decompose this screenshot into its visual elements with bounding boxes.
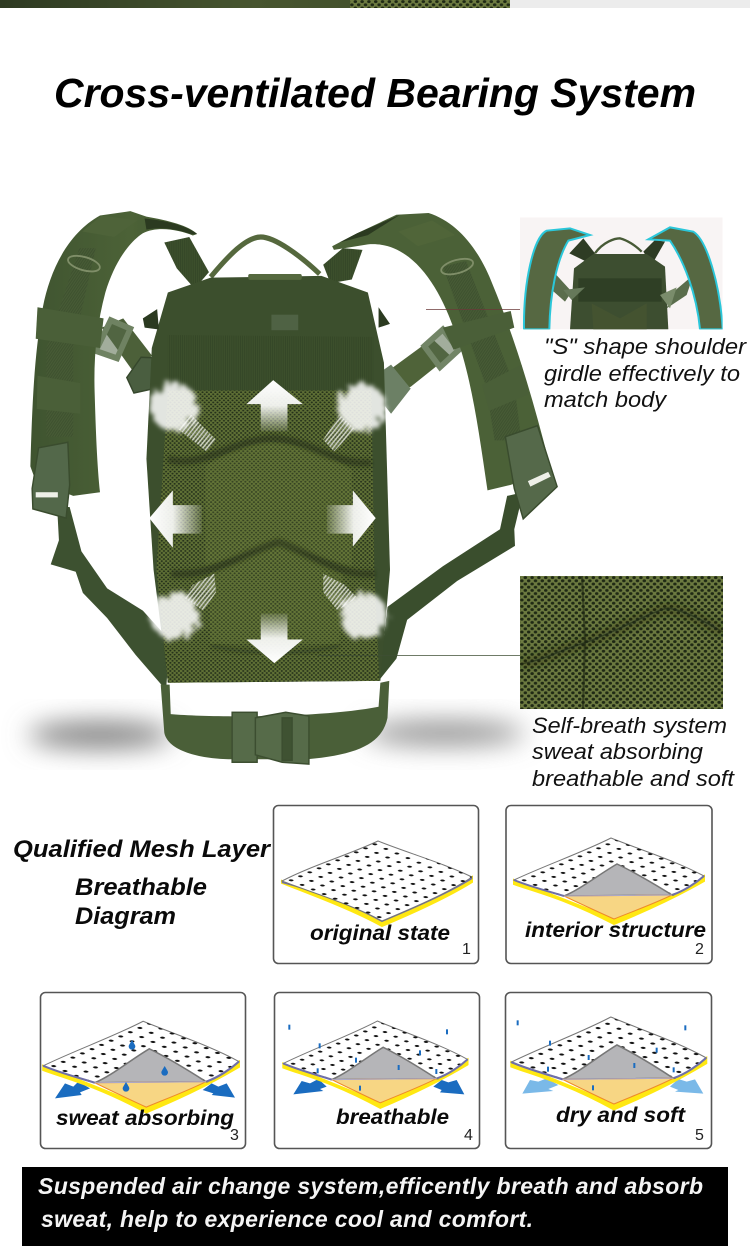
mesh back panel — [156, 390, 379, 683]
bottom banner: sweat, help to experience cool and comfort. — [41, 1206, 533, 1232]
shoulder caption — [544, 334, 748, 412]
left side strap and buckle — [96, 318, 184, 393]
leader line: shoulder detail — [426, 308, 520, 310]
diagram 1: original state — [274, 806, 478, 964]
arrow up — [246, 380, 303, 431]
mesh caption — [532, 713, 735, 791]
bottom banner: Suspended air change system,efficently breath and absorb — [38, 1173, 703, 1199]
shoulder caption: girdle effectively to — [544, 361, 740, 386]
bottom banner — [22, 1167, 728, 1246]
diagram 4: breathable — [274, 992, 480, 1148]
diagram 5: dry and soft — [506, 992, 712, 1148]
leader line: mesh detail — [318, 654, 520, 656]
mesh layer heading: Breathable — [75, 874, 207, 901]
backpack body — [143, 274, 390, 683]
waist buckle — [232, 712, 309, 764]
diagram 3: sweat absorbing: 3 — [230, 1127, 239, 1144]
waist belt — [161, 681, 389, 759]
inset: S-shape shoulder straps — [520, 217, 723, 329]
diagram 4: breathable: breathable — [336, 1106, 449, 1129]
mesh caption: breathable and soft — [532, 766, 735, 791]
left strap buckle — [32, 442, 70, 518]
mesh caption: Self-breath system — [532, 713, 727, 738]
diagram 5: dry and soft: dry and soft — [556, 1104, 686, 1127]
mesh layer heading — [13, 836, 272, 930]
right side strap and buckle — [366, 329, 459, 414]
lower left strap — [51, 507, 170, 690]
diagram 1: original state: original state — [310, 922, 450, 945]
shoulder caption: match body — [544, 387, 668, 412]
diagram 2: interior structure — [506, 806, 712, 964]
arrow left — [149, 490, 202, 548]
left shoulder strap — [30, 211, 197, 496]
diagram 2: interior structure: interior structure — [525, 919, 706, 942]
diagram 3: sweat absorbing — [40, 992, 246, 1148]
mesh layer heading: Qualified Mesh Layer — [13, 836, 272, 863]
shoulder caption: "S" shape shoulder — [544, 334, 748, 359]
air flow puffs — [150, 383, 387, 640]
top strip: cropped backpack photo — [0, 0, 750, 8]
right strap buckle — [505, 426, 557, 519]
ground shadow — [28, 721, 525, 748]
mesh caption: sweat absorbing — [532, 739, 704, 764]
upper connector straps — [164, 237, 362, 289]
arrow down — [246, 614, 303, 663]
inset: mesh close-up — [520, 576, 723, 709]
diagram 4: breathable: 4 — [464, 1127, 473, 1144]
title: Cross-ventilated Bearing System — [54, 70, 696, 116]
diagram 3: sweat absorbing: sweat absorbing — [56, 1107, 234, 1130]
backpack illustration — [30, 211, 557, 764]
diagram 1: original state: 1 — [462, 941, 471, 958]
right shoulder strap — [332, 213, 552, 490]
diagram 2: interior structure: 2 — [695, 941, 704, 958]
lower right strap — [379, 492, 523, 681]
carry handle — [211, 237, 320, 277]
diagram 5: dry and soft: 5 — [695, 1127, 704, 1144]
mesh layer heading: Diagram — [75, 903, 176, 930]
arrow right — [327, 490, 376, 547]
